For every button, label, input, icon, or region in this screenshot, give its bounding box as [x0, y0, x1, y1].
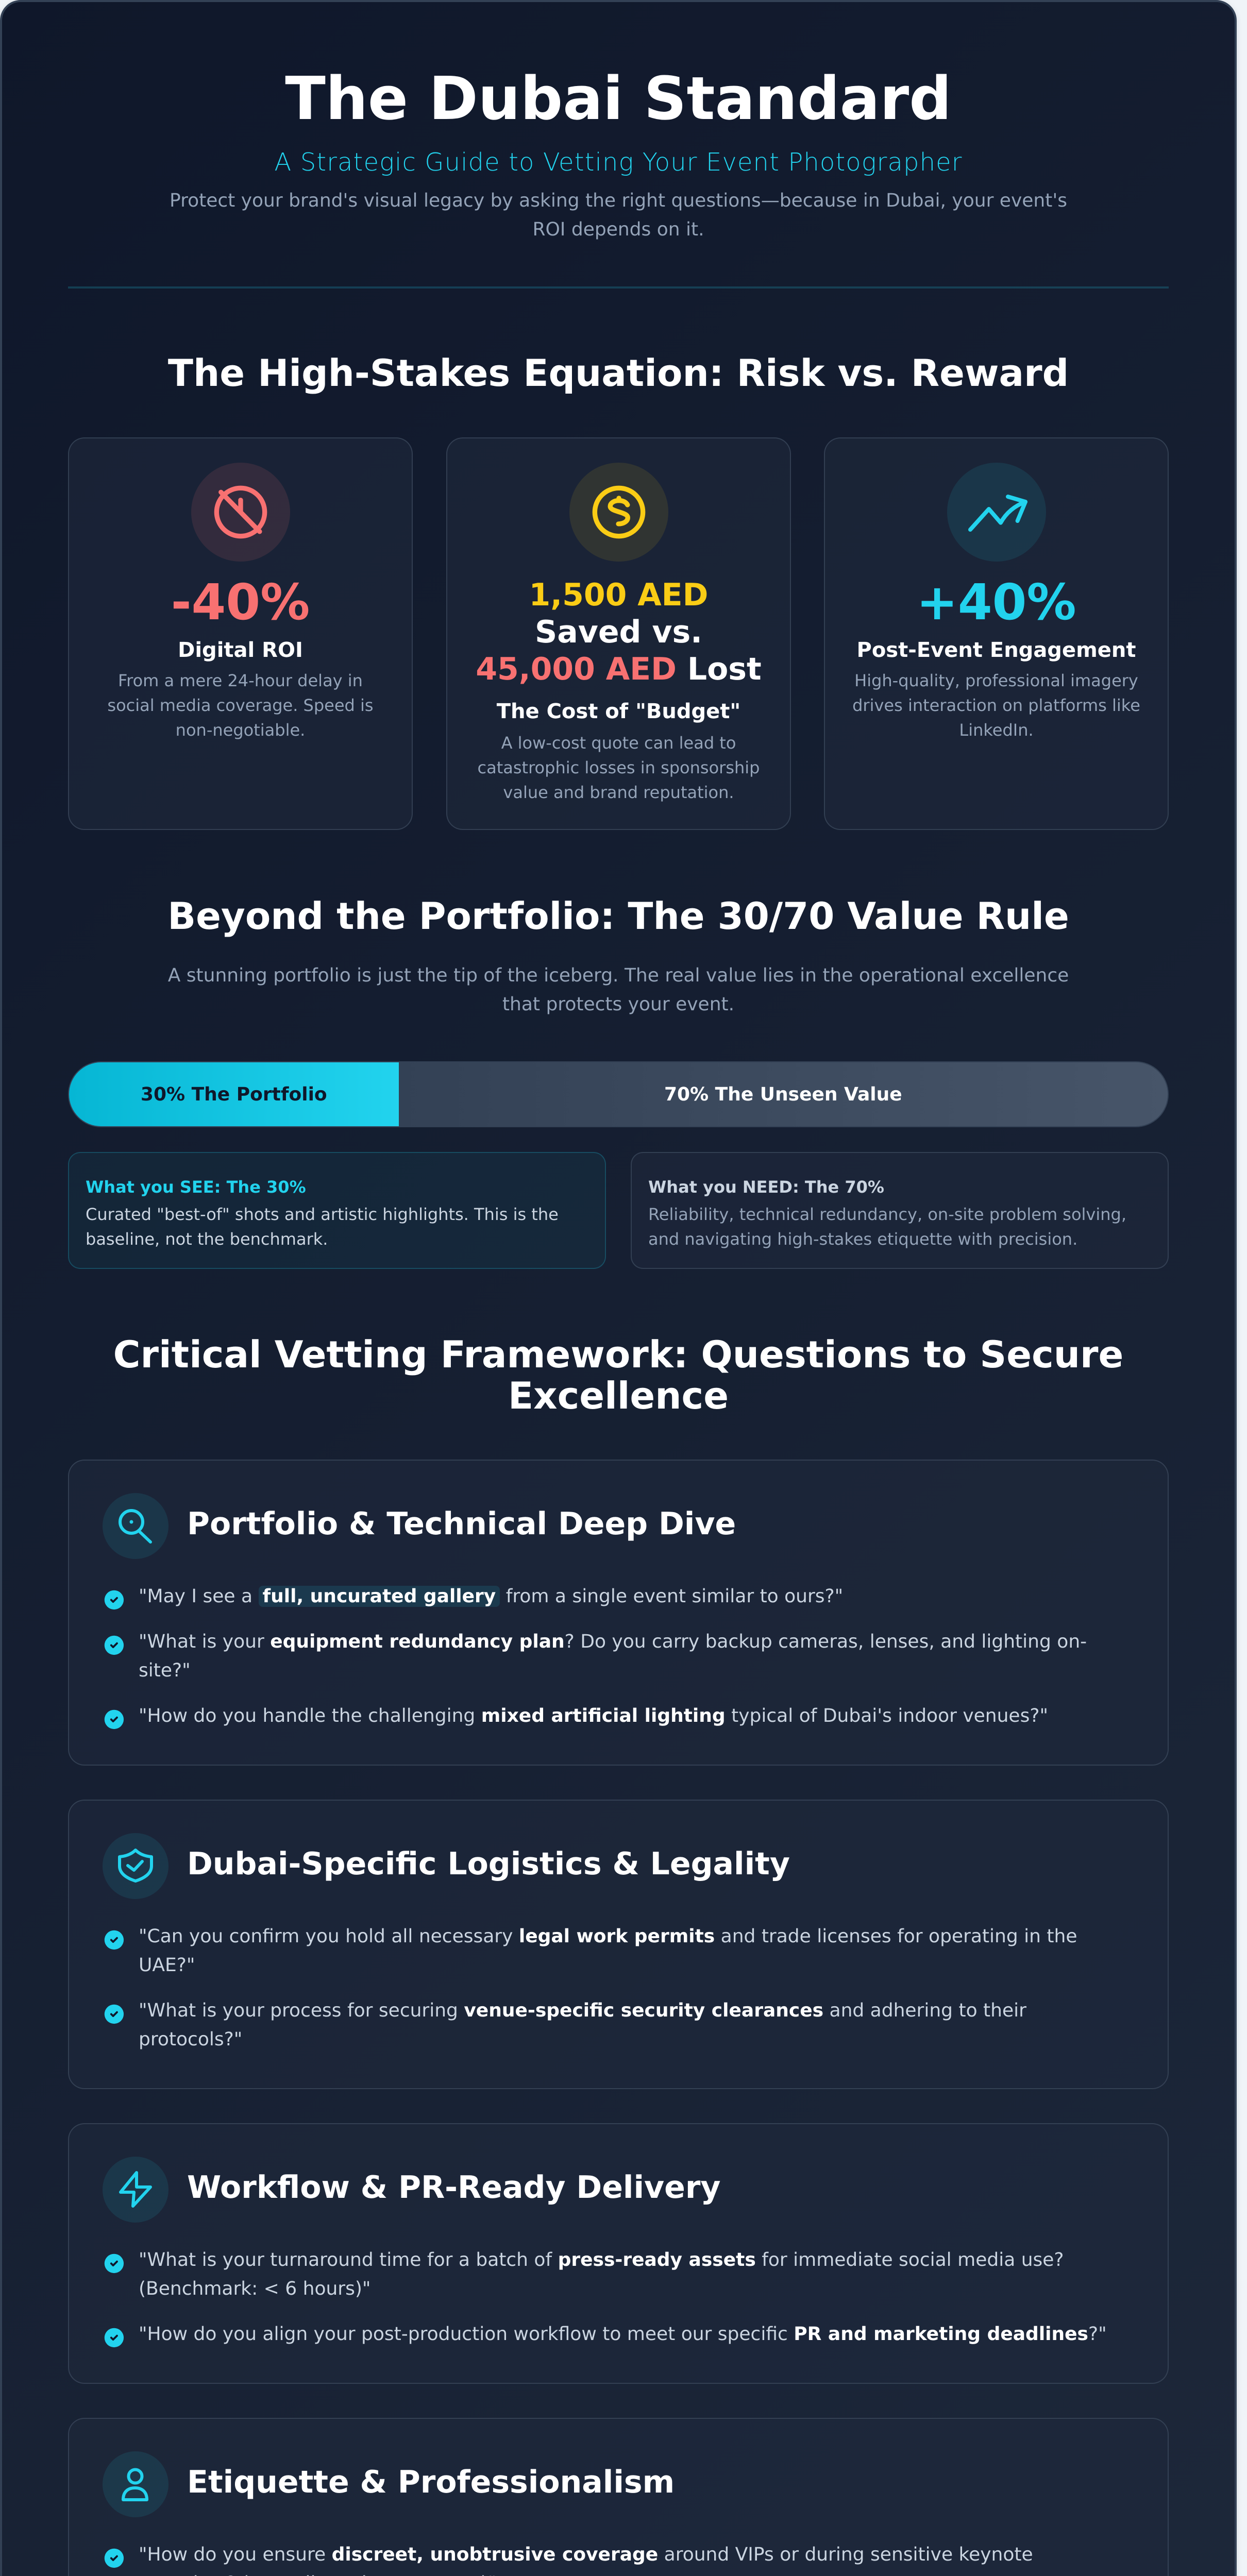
question 1: [103, 1922, 1133, 1980]
panel text: and navigating high-stakes etiquette with precision.: [648, 1229, 1077, 1249]
stat description: [107, 671, 374, 740]
icon: lightning bolt: [103, 2157, 168, 2223]
stat description: [852, 671, 1140, 740]
panel title: Etiquette & Professionalism: [187, 2464, 675, 2500]
icon: magnifier: [103, 1493, 168, 1559]
panel heading: What you NEED: The 70%: [648, 1177, 884, 1197]
section intro text: A stunning portfolio is just the tip of the iceberg. The real value lies in the operational excellence: [168, 965, 1069, 986]
stat label: Digital ROI: [178, 638, 303, 662]
stat description: drives interaction on platforms like: [852, 696, 1140, 715]
panel title: Dubai-Specific Logistics & Legality: [187, 1846, 790, 1882]
question 1: "Can you confirm you hold all necessary legal work permits and trade licenses for operating in the: [139, 1926, 1077, 1947]
section intro text: that protects your event.: [502, 994, 734, 1015]
icon: shield with check: [103, 1833, 168, 1899]
section intro text: [168, 965, 1069, 1015]
question 2: "How do you align your post-production workflow to meet our specific PR and marketing deadlines?": [139, 2324, 1107, 2345]
subtitle: A Strategic Guide to Vetting Your Event Photographer: [274, 148, 963, 177]
stat value: Saved vs.: [535, 614, 702, 650]
question 1: [103, 2246, 1133, 2303]
bar segment: 30 percent: 30% The Portfolio: [141, 1084, 327, 1105]
panel text: [86, 1205, 559, 1249]
stat value: -40%: [171, 573, 310, 631]
stat value: 1,500 AED: [529, 577, 708, 613]
panel: logistics and legality: [68, 1800, 1169, 2089]
question 3: "How do you handle the challenging mixed artificial lighting typical of Dubai's indoor venues?": [139, 1705, 1048, 1726]
question 2: "What is your process for securing venue-specific security clearances and adhering to their: [139, 2000, 1026, 2021]
heading: critical vetting framework: Excellence: [508, 1374, 729, 1417]
stat label: Post-Event Engagement: [856, 638, 1136, 662]
stat description: LinkedIn.: [959, 720, 1034, 740]
stat description: A low-cost quote can lead to: [501, 733, 736, 753]
question 1: (Benchmark: < 6 hours)": [139, 2278, 370, 2299]
icon: dollar coin: [569, 463, 668, 562]
stat value: [476, 577, 762, 687]
question 1: "How do you ensure discreet, unobtrusive coverage around VIPs or during sensitive keynote: [139, 2544, 1033, 2565]
bar segment: 70 percent: 70% The Unseen Value: [664, 1084, 902, 1105]
stat value: +40%: [916, 573, 1076, 631]
question 2: [103, 2320, 1133, 2349]
icon: trending arrow: [947, 463, 1046, 562]
question 2: [104, 1631, 1087, 1681]
panel: cost of budget stat: [446, 437, 791, 830]
heading: critical vetting framework: Critical Vetting Framework: Questions to Secure: [113, 1333, 1123, 1376]
question 2: site?": [139, 1660, 191, 1681]
question 1: "May I see a full, uncurated gallery from a single event similar to ours?": [139, 1586, 843, 1607]
stat label: The Cost of "Budget": [497, 700, 740, 723]
panel: portfolio and technical: [68, 1460, 1169, 1766]
panel: post-event engagement stat: [824, 437, 1169, 830]
panel: what you see: [68, 1152, 606, 1269]
intro text: ROI depends on it.: [532, 218, 704, 240]
stat description: High-quality, professional imagery: [854, 671, 1138, 690]
panel: etiquette and professionalism: [68, 2418, 1169, 2576]
intro text: Protect your brand's visual legacy by asking the right questions—because in Dubai, your event's: [170, 190, 1067, 211]
stat description: value and brand reputation.: [503, 783, 734, 802]
bar chart: 30/70 split: [68, 1061, 1169, 1127]
question 2: [103, 1996, 1133, 2054]
question 1: UAE?": [139, 1955, 195, 1976]
panel: what you need: [631, 1152, 1169, 1269]
question 1: [103, 2540, 1133, 2576]
stat value: 45,000 AED Lost: [476, 651, 762, 687]
icon: person: [103, 2451, 168, 2517]
stat description: From a mere 24-hour delay in: [118, 671, 363, 690]
question 2: "What is your equipment redundancy plan? Do you carry backup cameras, lenses, and lighting on-: [139, 1631, 1087, 1652]
panel: workflow and delivery: [68, 2123, 1169, 2384]
stat description: catastrophic losses in sponsorship: [478, 758, 760, 777]
panel text: baseline, not the benchmark.: [86, 1229, 328, 1249]
panel title: Workflow & PR-Ready Delivery: [187, 2170, 721, 2206]
bar segment: 70 percent: [399, 1062, 1168, 1126]
question 2: protocols?": [139, 2029, 242, 2050]
heading: high-stakes equation: The High-Stakes Equation: Risk vs. Reward: [168, 351, 1069, 395]
question 1: "What is your turnaround time for a batch of press-ready assets for immediate social media use?: [139, 2249, 1064, 2270]
intro text: [170, 190, 1067, 240]
icon: clock with slash: [191, 463, 290, 562]
stat description: non-negotiable.: [176, 720, 305, 740]
title: The Dubai Standard: [285, 64, 952, 133]
panel title: Portfolio & Technical Deep Dive: [187, 1506, 736, 1542]
stat description: [478, 733, 760, 802]
panel text: Reliability, technical redundancy, on-site problem solving,: [648, 1205, 1126, 1224]
panel: digital ROI stat: [68, 437, 413, 830]
heading: critical vetting framework: [113, 1333, 1123, 1417]
heading: 30/70 value rule: Beyond the Portfolio: The 30/70 Value Rule: [167, 894, 1069, 938]
panel text: Curated "best-of" shots and artistic highlights. This is the: [86, 1205, 559, 1224]
panel heading: What you SEE: The 30%: [86, 1177, 306, 1197]
stat description: social media coverage. Speed is: [107, 696, 374, 715]
bar segment: 30 percent: [69, 1062, 399, 1126]
panel text: [648, 1205, 1126, 1249]
